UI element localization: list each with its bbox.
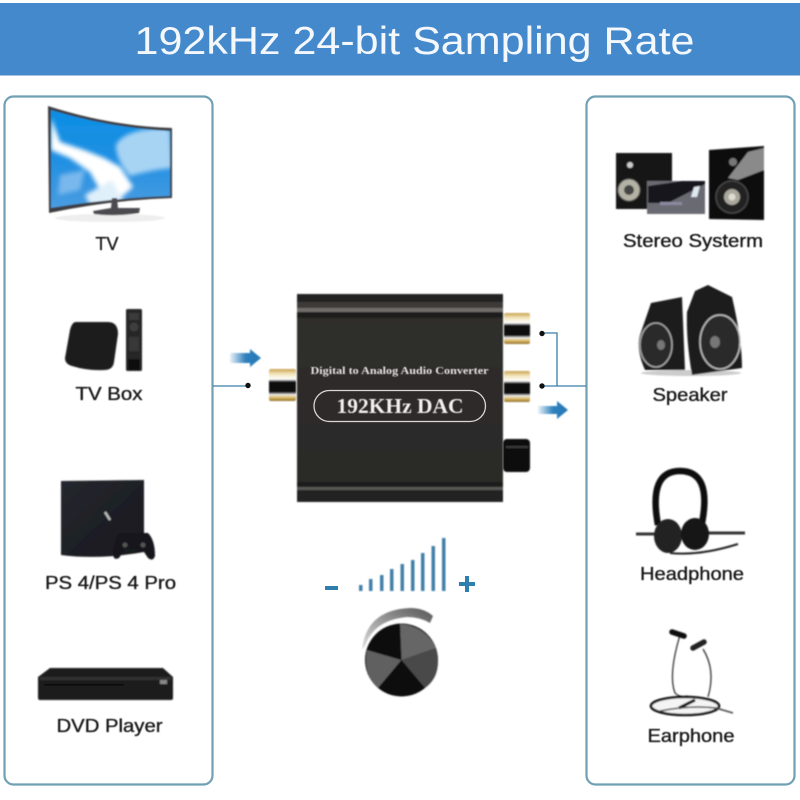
- DAC badge: [314, 390, 486, 422]
- label: Stereo Systerm: Stereo Systerm: [623, 231, 763, 251]
- arrow: output: [538, 401, 568, 419]
- icon: PS4 and controller: [61, 480, 155, 560]
- icon: TV: [48, 106, 172, 222]
- volume knob: [362, 608, 438, 696]
- volume indicator: [325, 538, 475, 592]
- icon: earphones: [651, 632, 733, 715]
- label: Earphone: Earphone: [648, 726, 734, 746]
- icon: stereo system: [616, 146, 764, 220]
- arrow: input: [230, 349, 261, 367]
- icon: TV box and remote: [65, 309, 142, 371]
- device caption: Digital to Analog Audio Converter: [310, 365, 489, 377]
- label: TV: TV: [96, 234, 118, 254]
- knob dial: [365, 624, 438, 696]
- title: 192kHz 24-bit Sampling Rate: [134, 20, 694, 63]
- panel: output devices: [586, 96, 794, 784]
- knob arc: [362, 608, 433, 650]
- DAC converter device: [269, 294, 530, 502]
- input RCA jack: [269, 369, 296, 401]
- icon: speakers: [639, 285, 742, 376]
- label: Speaker: Speaker: [652, 385, 728, 405]
- label: TV Box: TV Box: [76, 384, 142, 404]
- output RCA jacks: [504, 313, 530, 402]
- device body: [297, 294, 503, 502]
- DAC badge: 192KHz DAC: [336, 394, 464, 418]
- plus sign: [459, 576, 475, 592]
- icon: headphones: [636, 471, 745, 554]
- volume bars: [359, 538, 446, 591]
- label: DVD Player: DVD Player: [56, 716, 162, 736]
- volume knob on device: [503, 439, 530, 472]
- input connection line: [213, 383, 251, 388]
- label: Headphone: Headphone: [640, 564, 744, 584]
- panel: input sources: [4, 96, 212, 784]
- title banner: [0, 3, 800, 76]
- minus sign: [325, 586, 338, 590]
- icon: DVD player: [38, 668, 173, 700]
- label: PS 4/PS 4 Pro: PS 4/PS 4 Pro: [45, 573, 176, 593]
- output connection lines: [539, 331, 586, 389]
